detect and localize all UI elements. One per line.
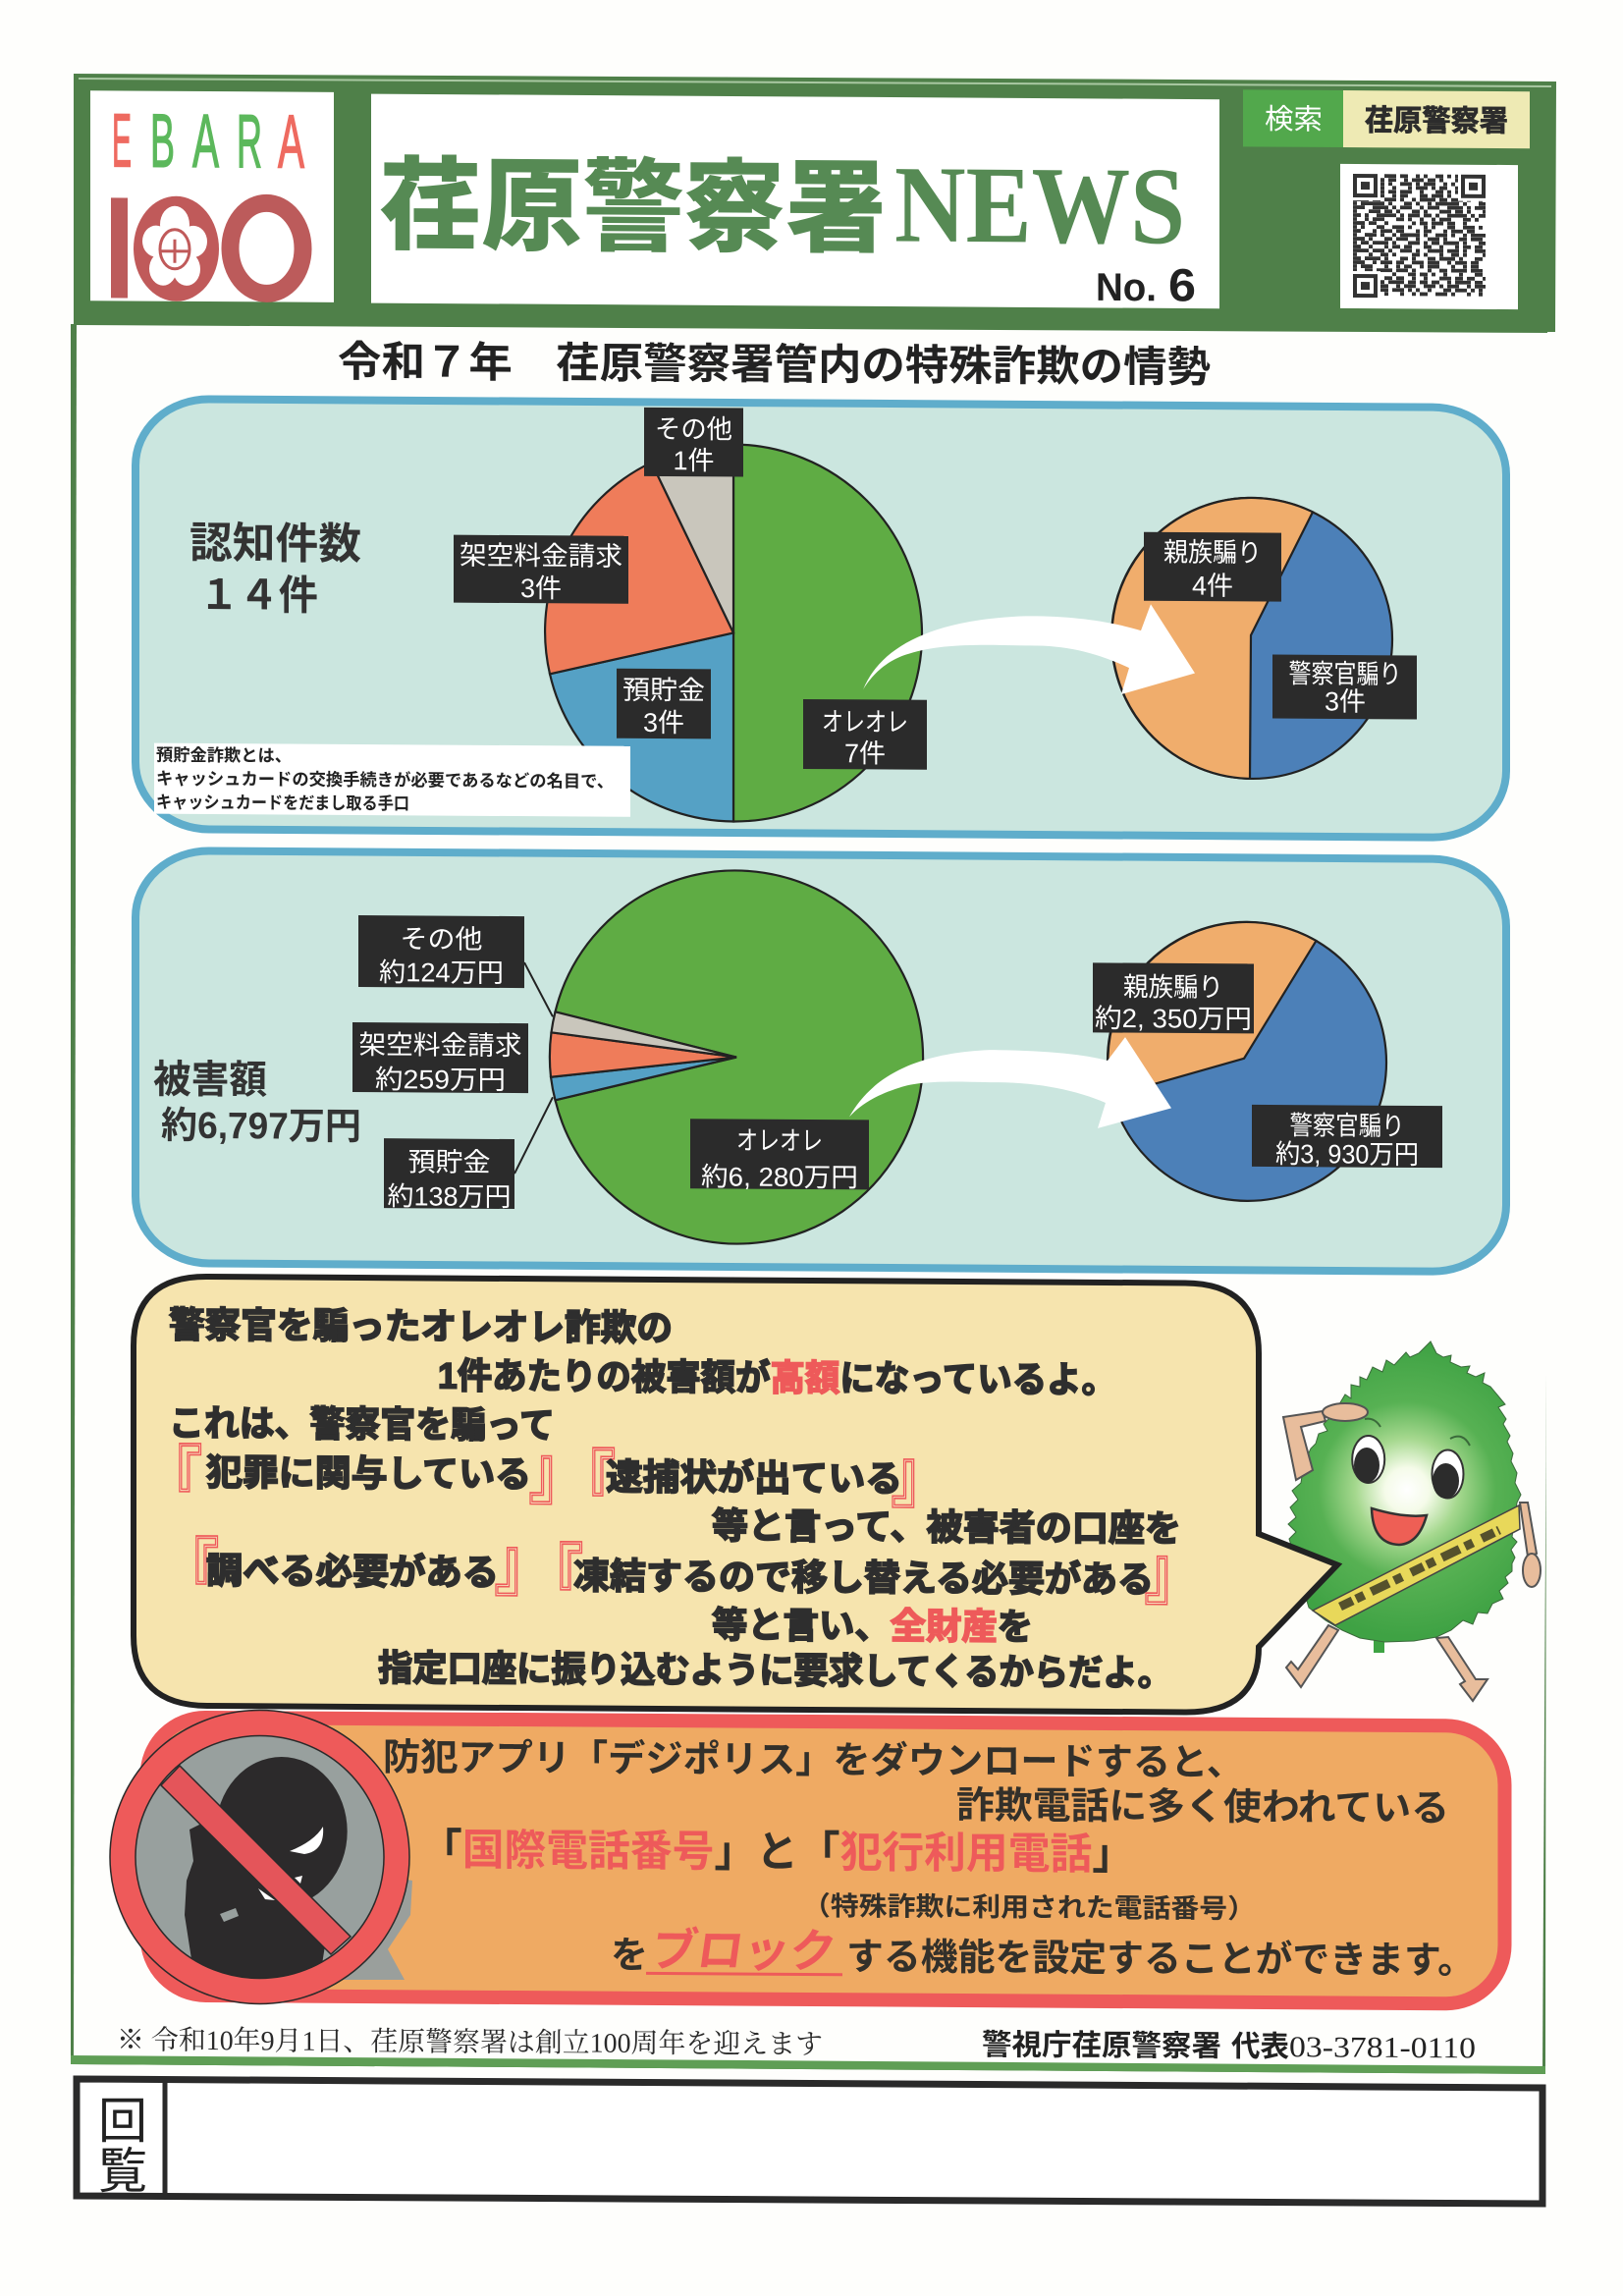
label: fictitious billing: 約259万円 [375,1065,506,1095]
search badge: 荏原警察署 [1365,105,1508,138]
pie chart: cases by type [545,443,922,823]
mascot sash [1313,1505,1520,1625]
label: police impersonation [1252,1105,1442,1170]
promotion text: ブロック [647,1925,839,1978]
bubble text: police impersonation explanation: これは、警察官を騙って [169,1403,555,1446]
heading: case count: 認知件数 [189,519,361,569]
label: fictitious billing: 架空料金請求 [359,1030,522,1061]
footer contact: 代表 [1231,2031,1289,2063]
mascot raised arm [1283,1403,1541,1587]
stamp label: 回 [98,2094,147,2149]
bubble text: police impersonation explanation: 犯罪に関与している [206,1452,531,1495]
label: relative impersonation: 親族騙り [1123,972,1223,1003]
bubble text: police impersonation explanation: 』 [1144,1532,1202,1614]
mascot legs [1286,1625,1488,1701]
promotion text: 防犯アプリ「デジポリス」をダウンロードすると、 [383,1736,1244,1784]
logo letters: A [278,99,304,185]
circulation stamp box [77,2079,1542,2204]
label: savings: 預貯金 [408,1147,490,1177]
label: ore-ore: オレオレ [736,1126,823,1156]
note box: キャッシュカードをだまし取る手口 [156,793,409,813]
bubble text: police impersonation explanation: 『 [526,1537,583,1618]
label: relative impersonation [1144,532,1281,602]
label: other: その他 [400,924,482,955]
promotion text: を [611,1936,648,1977]
green page frame [71,74,1556,2074]
footer contact: 03-3781-0110 [1289,2031,1476,2064]
leader lines [514,962,553,1174]
logo letters [112,98,304,185]
logo letters: R [237,99,262,184]
issue number: 6 [1168,258,1196,311]
issue number: No. [1096,266,1157,309]
label: ore-ore: 7件 [844,738,886,768]
label: police impersonation: 警察官騙り [1288,659,1402,689]
heading: case count [189,519,361,619]
promotion text: 詐欺電話に多く使われている [956,1785,1449,1830]
promotion text: する機能を設定することができます。 [846,1937,1475,1982]
label: fictitious billing: 架空料金請求 [460,541,622,572]
hooded silhouette [185,1757,348,1984]
label: police impersonation: 警察官騙り [1290,1111,1404,1141]
label: ore-ore [803,699,927,770]
promotion text: 「国際電話番号」と「犯行利用電話」 [420,1826,1134,1879]
footer contact [982,2029,1476,2064]
label: ore-ore: オレオレ [822,707,908,738]
search badge [1243,89,1530,148]
heading: damage total: 約6,797万円 [161,1106,361,1148]
label: savings [384,1138,514,1212]
bubble text: police impersonation explanation: 』 [891,1436,948,1517]
label: other [358,915,524,988]
heading: damage total: 被害額 [153,1059,267,1102]
logo letters: A [192,99,219,184]
bubble text: police impersonation explanation: 調べる必要がある [206,1551,499,1593]
label: police impersonation: 約3, 930万円 [1275,1139,1419,1170]
bubble text: police impersonation explanation: 1件あたりの被害額が高額になっているよ。 [438,1356,1116,1400]
mascot body [1288,1341,1521,1653]
label: savings: 預貯金 [622,676,705,705]
heading: case count: １４件 [199,572,318,619]
label: relative impersonation: 約2, 350万円 [1095,1004,1252,1034]
logo letters: E [112,98,132,184]
panel: damage amount [135,850,1506,1272]
label: ore-ore: 約6, 280万円 [701,1162,858,1192]
bubble text: police impersonation explanation: 凍結するので移し替える必要がある [573,1556,1154,1600]
label: savings [617,669,711,738]
label: fictitious billing [454,535,628,604]
bubble text: police impersonation explanation: 『 [145,1439,202,1520]
logo letters: B [150,99,175,184]
title box [371,94,1219,311]
bubble text: police impersonation explanation: 等と言い、全財産を [712,1605,1033,1647]
mascot face [1352,1419,1470,1545]
logo number 100 with cherry blossom [111,195,302,302]
note box [154,743,630,817]
label: police impersonation [1272,655,1417,720]
label: ore-ore [690,1119,869,1192]
bubble text: police impersonation explanation: 逮捕状が出ている [606,1457,902,1500]
pie chart: ore-ore damage breakdown [1108,921,1386,1202]
footer contact: 警視庁荏原警察署 [982,2029,1221,2063]
mascot: green leaf character [1283,1341,1541,1701]
note box: キャッシュカードの交換手続きが必要であるなどの名目で、 [156,769,614,792]
arrow [849,1035,1171,1128]
label: savings: 3件 [643,708,684,738]
bubble text: police impersonation explanation: 『 [161,1531,220,1613]
section heading: 令和７年 荏原警察署管内の特殊詐欺の情勢 [338,339,1211,392]
issue number [1096,258,1196,311]
stamp label [98,2094,147,2199]
note box: 預貯金詐欺とは、 [156,745,292,766]
bubble text: police impersonation explanation: 指定口座に振り込むように要求してくるからだよ。 [378,1648,1172,1693]
speech bubble [134,1277,1337,1713]
label: other: 1件 [673,446,715,475]
heading: damage total [153,1059,361,1148]
bubble text: police impersonation explanation: 』 [528,1432,586,1514]
label: relative impersonation [1093,962,1254,1034]
footer note: 100th anniversary: ※ 令和10年9月1日、荏原警察署は創立100周年を迎えます [117,2024,823,2060]
promotion text [383,1736,1475,1982]
bubble text: police impersonation explanation: 『 [558,1443,616,1525]
promotion text: （特殊詐欺に利用された電話番号） [802,1891,1256,1924]
label: relative impersonation: 4件 [1192,572,1233,601]
logo: EBARA 100 [90,90,334,302]
panel: app promotion [147,1718,1504,2004]
pie chart: ore-ore breakdown [1111,497,1392,780]
label: other [644,408,743,477]
bubble text: police impersonation explanation: 等と言って、被害者の口座を [712,1505,1181,1549]
stamp label: 覧 [98,2144,147,2199]
title: 荏原警察署NEWS [380,140,1185,267]
title: 荏原警察署NEWS: 荏原警察署 [380,149,887,265]
pie chart: damage by type [550,869,923,1245]
label: police impersonation: 3件 [1325,686,1366,717]
icon: prohibited fraudster [110,1711,412,2003]
title: 荏原警察署NEWS: NEWS [894,144,1185,267]
bubble text: police impersonation explanation: 警察官を騙ったオレオレ詐欺の [169,1305,673,1348]
label: savings: 約138万円 [388,1181,512,1212]
label: fictitious billing: 3件 [520,574,562,603]
label: other: その他 [655,414,732,444]
panel: number of cases [135,399,1506,838]
label: fictitious billing [352,1022,528,1095]
QR code [1340,164,1518,309]
label: relative impersonation: 親族騙り [1163,537,1262,568]
bubble text: police impersonation explanation: 』 [494,1523,552,1606]
label: other: 約124万円 [379,957,504,988]
bubble text: police impersonation explanation [145,1305,1202,1694]
arrow [863,602,1195,695]
search badge: 検索 [1265,103,1323,136]
